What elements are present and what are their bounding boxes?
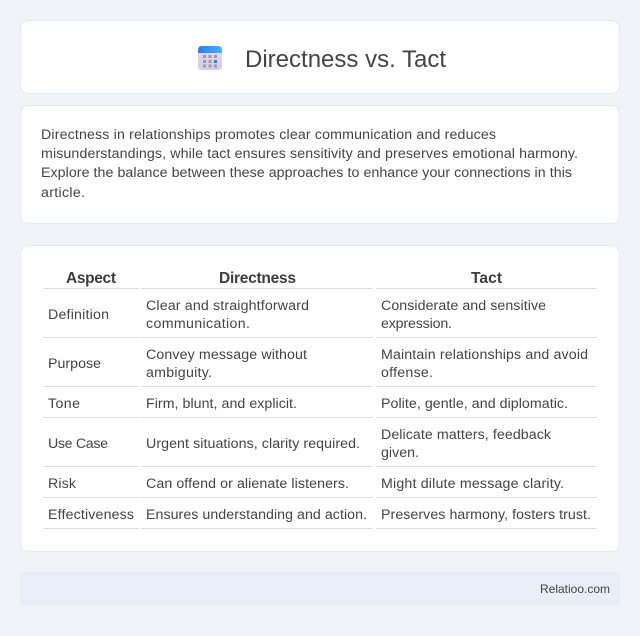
row: purpose: offense. xyxy=(381,365,433,381)
row: definition: Definition xyxy=(48,307,109,323)
row: tone: Tone xyxy=(48,396,80,412)
row: definition: communication. xyxy=(146,316,250,332)
footer bar xyxy=(20,572,620,606)
row: use case: given. xyxy=(381,445,419,461)
text block: introduction: Directness in relationships promotes clear communication and reduces xyxy=(41,127,496,143)
row: risk: Can offend or alienate listeners. xyxy=(146,476,349,492)
panel: comparison table xyxy=(20,246,620,552)
row: definition xyxy=(48,298,546,332)
table header xyxy=(66,270,502,287)
table header: Tact xyxy=(471,270,502,287)
row: effectiveness: Ensures understanding and action. xyxy=(146,507,367,523)
row: purpose: Maintain relationships and avoid xyxy=(381,347,588,363)
row: definition: expression. xyxy=(381,316,452,332)
table header: Aspect xyxy=(66,270,116,287)
footer source text: Relatioo.com xyxy=(540,582,610,596)
row: use case: Delicate matters, feedback xyxy=(381,427,552,443)
table header: Directness xyxy=(219,270,296,287)
row: tone: Polite, gentle, and diplomatic. xyxy=(381,396,568,412)
text block: introduction xyxy=(41,127,578,201)
row: purpose: Convey message without xyxy=(146,347,307,363)
row: tone: Firm, blunt, and explicit. xyxy=(146,396,297,412)
text block: introduction: misunderstandings, while tact ensures sensitivity and preserves emotional harmony. xyxy=(41,146,578,162)
icon: calendar xyxy=(198,46,222,70)
row: effectiveness: Preserves harmony, fosters trust. xyxy=(381,507,591,523)
row: effectiveness xyxy=(48,507,591,523)
row: definition: Clear and straightforward xyxy=(146,298,309,314)
row: purpose: Purpose xyxy=(48,356,101,372)
row: use case: Use Case xyxy=(48,436,108,452)
title: Directness vs. Tact xyxy=(245,46,446,73)
row: effectiveness: Effectiveness xyxy=(48,507,134,523)
panel: title card xyxy=(20,20,620,94)
row: definition: Considerate and sensitive xyxy=(381,298,546,314)
row: use case xyxy=(48,427,552,461)
panel: introduction xyxy=(20,106,620,224)
row: use case: Urgent situations, clarity required. xyxy=(146,436,360,452)
row: purpose: ambiguity. xyxy=(146,365,212,381)
row: risk: Risk xyxy=(48,476,77,492)
row: purpose xyxy=(48,347,588,381)
row: risk: Might dilute message clarity. xyxy=(381,476,564,492)
row: risk xyxy=(48,476,564,492)
text block: introduction: article. xyxy=(41,185,85,201)
text block: introduction: Explore the balance between these approaches to enhance your connections in this xyxy=(41,165,572,181)
row: tone xyxy=(48,396,568,412)
